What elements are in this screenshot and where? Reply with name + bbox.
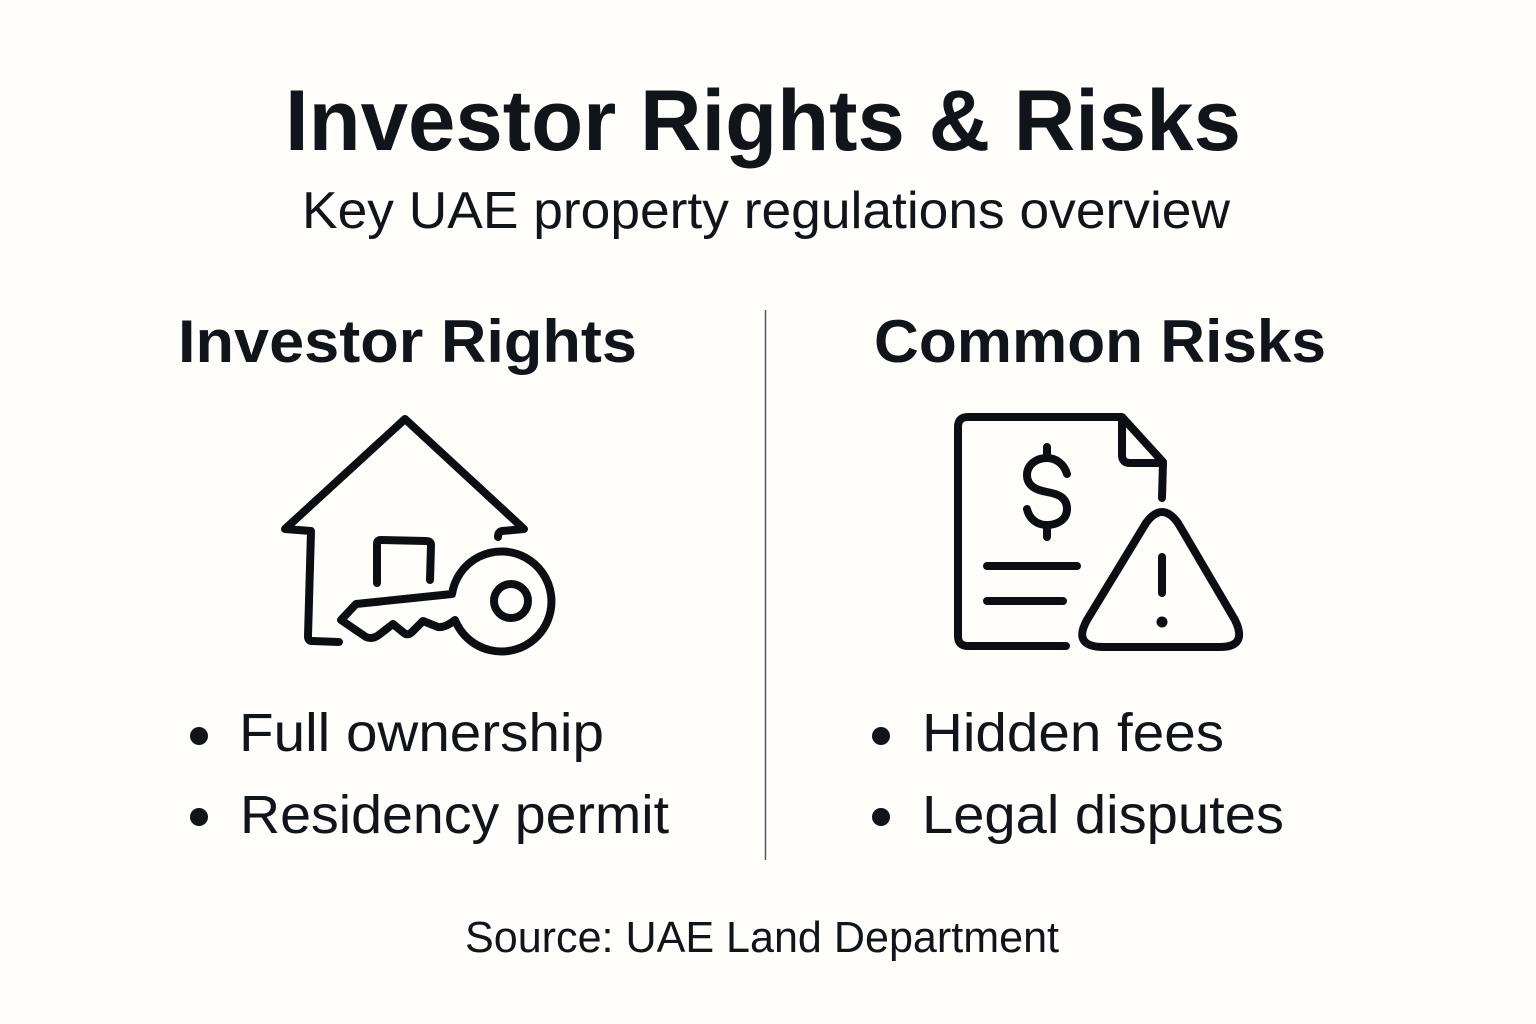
bullet list: rights: Residency permit: [240, 785, 669, 845]
icon: warning dot: [1156, 616, 1168, 628]
heading: common risks: Common Risks: [874, 308, 1326, 375]
icon: document with dollar and warning: [958, 417, 1239, 647]
panel: investor rights: [178, 308, 669, 845]
panel: common risks: [872, 308, 1326, 845]
title: Investor Rights & Risks: [285, 73, 1241, 169]
bullet list: risks: Legal disputes: [922, 785, 1284, 845]
subtitle: Key UAE property regulations overview: [302, 182, 1230, 240]
bullet list: risks: [872, 703, 1284, 845]
source note: Source: UAE Land Department: [465, 913, 1059, 962]
heading: investor rights: Investor Rights: [178, 308, 637, 375]
divider: [764, 310, 766, 860]
bullet list: risks: Hidden fees: [922, 703, 1224, 763]
icon: house with key: [285, 419, 551, 651]
bullet list: rights: [190, 703, 669, 845]
bullet list: rights: Full ownership: [239, 703, 604, 763]
